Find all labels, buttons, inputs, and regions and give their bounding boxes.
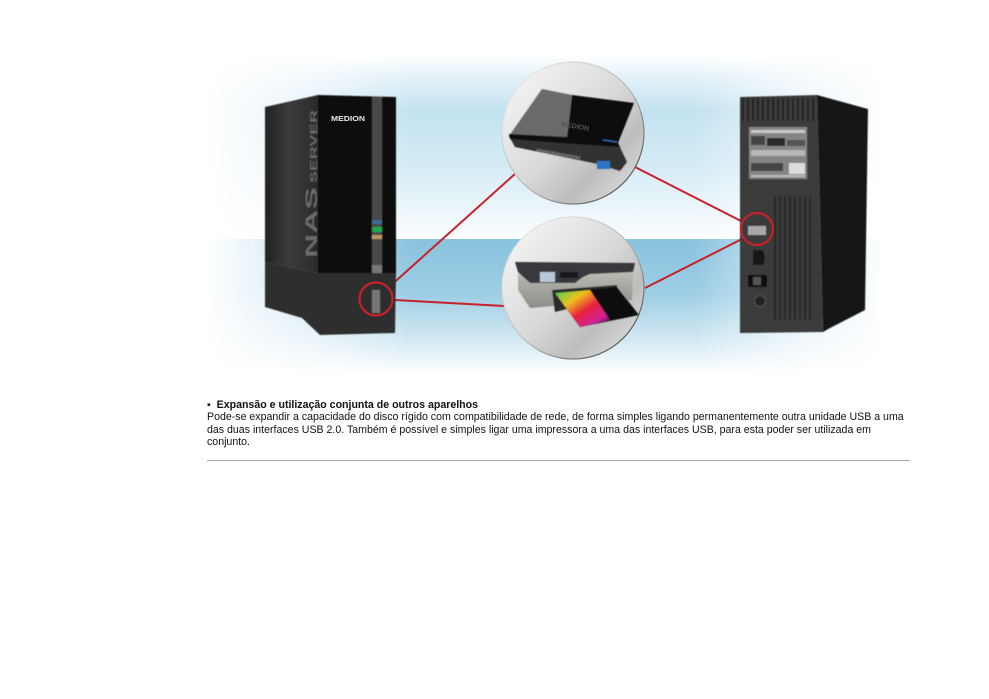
- network port: [753, 250, 765, 265]
- body line 3: conjunto.: [207, 436, 250, 448]
- drive front face: [509, 133, 627, 171]
- printed photo: [555, 287, 639, 327]
- tower lower base: [265, 262, 396, 335]
- drive vent: [537, 150, 580, 158]
- power switch: [748, 275, 767, 287]
- USB port: [748, 226, 766, 235]
- drive top left half: [509, 89, 572, 138]
- red highlight circle: USB front: [360, 282, 392, 316]
- printer lid: [515, 262, 635, 283]
- back side panel: [817, 95, 868, 332]
- status lights: [372, 220, 382, 273]
- tower side panel: [265, 95, 318, 273]
- NAS SERVER vertical lettering: [302, 109, 321, 258]
- background: blue sky and water band: [205, 55, 885, 374]
- red connector lines: [388, 167, 743, 306]
- NAS server back view: [740, 95, 868, 333]
- drive blue port: [597, 161, 610, 169]
- drive logo: MEDION: [561, 121, 589, 133]
- circle: printer: [502, 217, 644, 359]
- paper tray: [552, 285, 618, 312]
- rating label: [749, 127, 807, 179]
- back panel: [740, 95, 823, 333]
- product illustration: [224, 61, 869, 368]
- red highlight circle: USB back: [741, 213, 773, 245]
- circle: external USB drive: [502, 62, 644, 204]
- printer screen: [540, 272, 555, 282]
- NAS SERVER vertical lettering: NAS: [302, 187, 321, 258]
- text block: expansion description: [207, 399, 904, 448]
- printer buttons: [560, 272, 578, 278]
- divider: [207, 460, 910, 461]
- USB slot: [372, 290, 380, 313]
- NAS server front view: [265, 95, 396, 335]
- MEDION logo: MEDION: [331, 114, 365, 123]
- power socket: [754, 296, 766, 306]
- front light strip: [372, 97, 382, 273]
- heading: ▪ Expansão e utilização conjunta de outros aparelhos: [207, 399, 478, 411]
- NAS SERVER vertical lettering: SERVER: [309, 109, 320, 183]
- lower vents: [775, 196, 810, 320]
- top vents: [743, 98, 813, 121]
- drive blue light line: [603, 140, 617, 142]
- body line 1: Pode-se expandir a capacidade do disco rígido com compatibilidade de rede, de forma simples ligando permanentemente outra unidade USB a uma: [207, 411, 904, 423]
- drive front trim: [509, 134, 620, 147]
- printer body: [518, 265, 633, 308]
- drive top right half: [567, 95, 634, 143]
- body line 2: das duas interfaces USB 2.0. Também é possível e simples ligar uma impressora a uma das interfaces USB, para esta poder ser utilizada em: [207, 424, 871, 436]
- tower front panel: [318, 95, 396, 273]
